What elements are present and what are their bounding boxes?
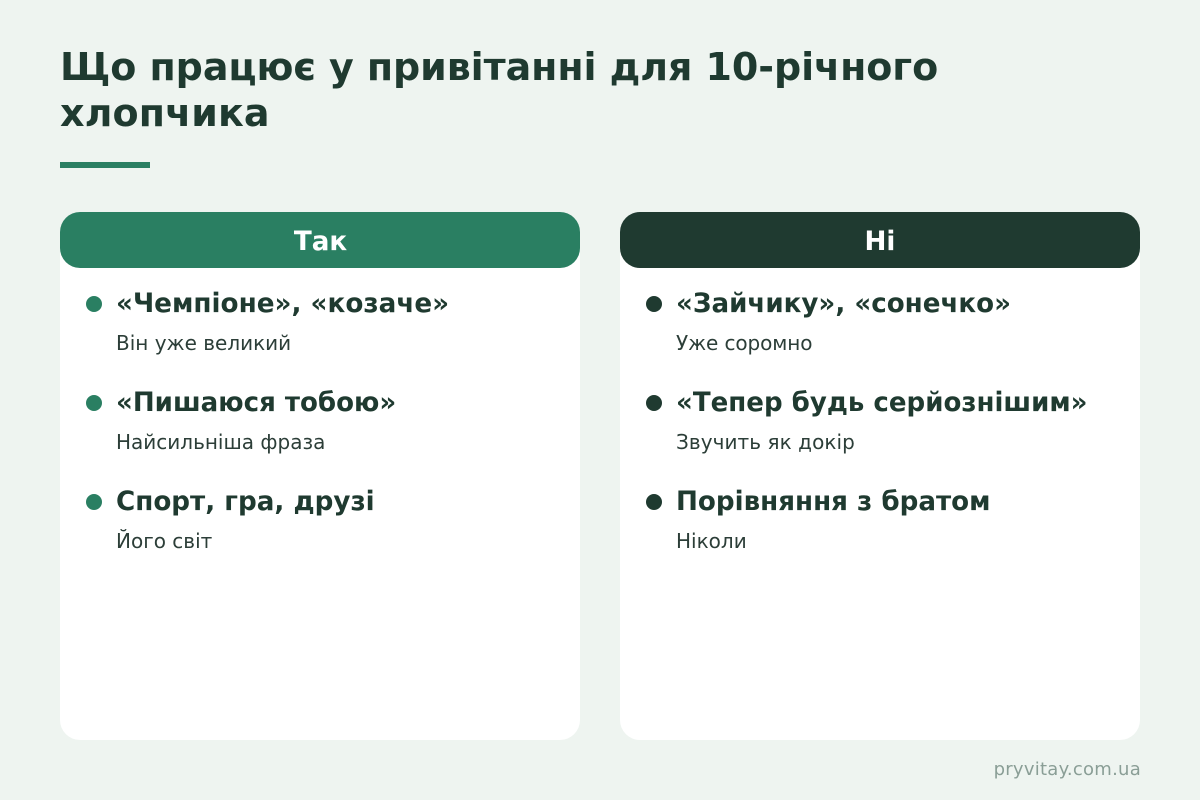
- title: [60, 45, 938, 135]
- title accent bar: [60, 162, 150, 168]
- no header: Ні: [865, 226, 895, 257]
- yes header: [60, 212, 580, 268]
- yes header: Так: [293, 226, 347, 257]
- yes item 1: [86, 288, 449, 355]
- no header: [620, 212, 1140, 268]
- no item 2: [646, 387, 1087, 454]
- yes item 2: «Пишаюся тобою»: [116, 387, 396, 418]
- title: Що працює у привітанні для 10-річного: [60, 45, 938, 89]
- no item 1: [646, 288, 1011, 355]
- no item 2: Звучить як докір: [676, 430, 855, 454]
- no item 2: «Тепер будь серйознішим»: [676, 387, 1087, 418]
- no item 1: Уже соромно: [676, 331, 812, 355]
- yes item 3: [86, 486, 375, 553]
- no item 3: Ніколи: [676, 529, 747, 553]
- no item 3: Порівняння з братом: [676, 486, 991, 517]
- yes item 2: Найсильніша фраза: [116, 430, 325, 454]
- yes item 1: «Чемпіоне», «козаче»: [116, 288, 449, 319]
- no item 3: [646, 486, 991, 553]
- yes item 3: Його світ: [116, 529, 212, 553]
- no item 1: «Зайчику», «сонечко»: [676, 288, 1011, 319]
- title: хлопчика: [60, 91, 270, 135]
- panel: no: [620, 212, 1140, 740]
- yes item 2: [86, 387, 396, 454]
- panel: yes: [60, 212, 580, 740]
- footer source: pryvitay.com.ua: [994, 759, 1141, 780]
- yes item 1: Він уже великий: [116, 331, 291, 355]
- yes item 3: Спорт, гра, друзі: [116, 486, 375, 517]
